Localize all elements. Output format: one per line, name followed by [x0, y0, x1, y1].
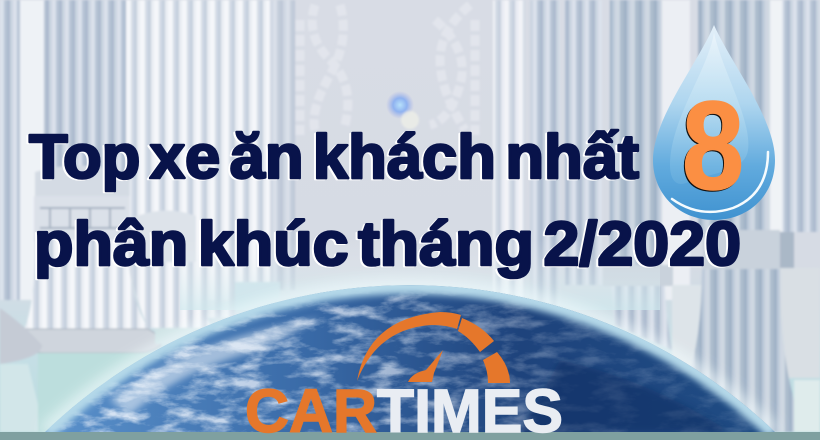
second right column base [611, 286, 672, 350]
far columns, left of centre [195, 0, 270, 300]
title line 1: Top xe ăn khách nhất [29, 123, 639, 192]
logo: CarTimes [245, 312, 563, 440]
left urn and pedestal [0, 308, 42, 364]
bottom strip [0, 432, 820, 440]
title [29, 123, 741, 279]
title line 2: phân khúc tháng 2/2020 [34, 210, 741, 279]
globe [40, 285, 780, 432]
big right column base [680, 269, 794, 432]
left column drum [35, 166, 130, 198]
icon: speedometer arc [357, 312, 510, 383]
globe halo [45, 285, 775, 432]
right wall [780, 268, 820, 378]
left column flared base [24, 240, 150, 330]
icon: water drop with number 8 [653, 25, 775, 220]
left columns [0, 0, 20, 300]
second column drum and base [132, 210, 196, 262]
right pedestals [703, 230, 780, 269]
number 8: 8 [682, 77, 744, 216]
glow behind title [180, 240, 660, 310]
centre lanterns [300, 5, 475, 135]
far columns, right of centre [493, 0, 525, 300]
lens flare [386, 91, 419, 129]
